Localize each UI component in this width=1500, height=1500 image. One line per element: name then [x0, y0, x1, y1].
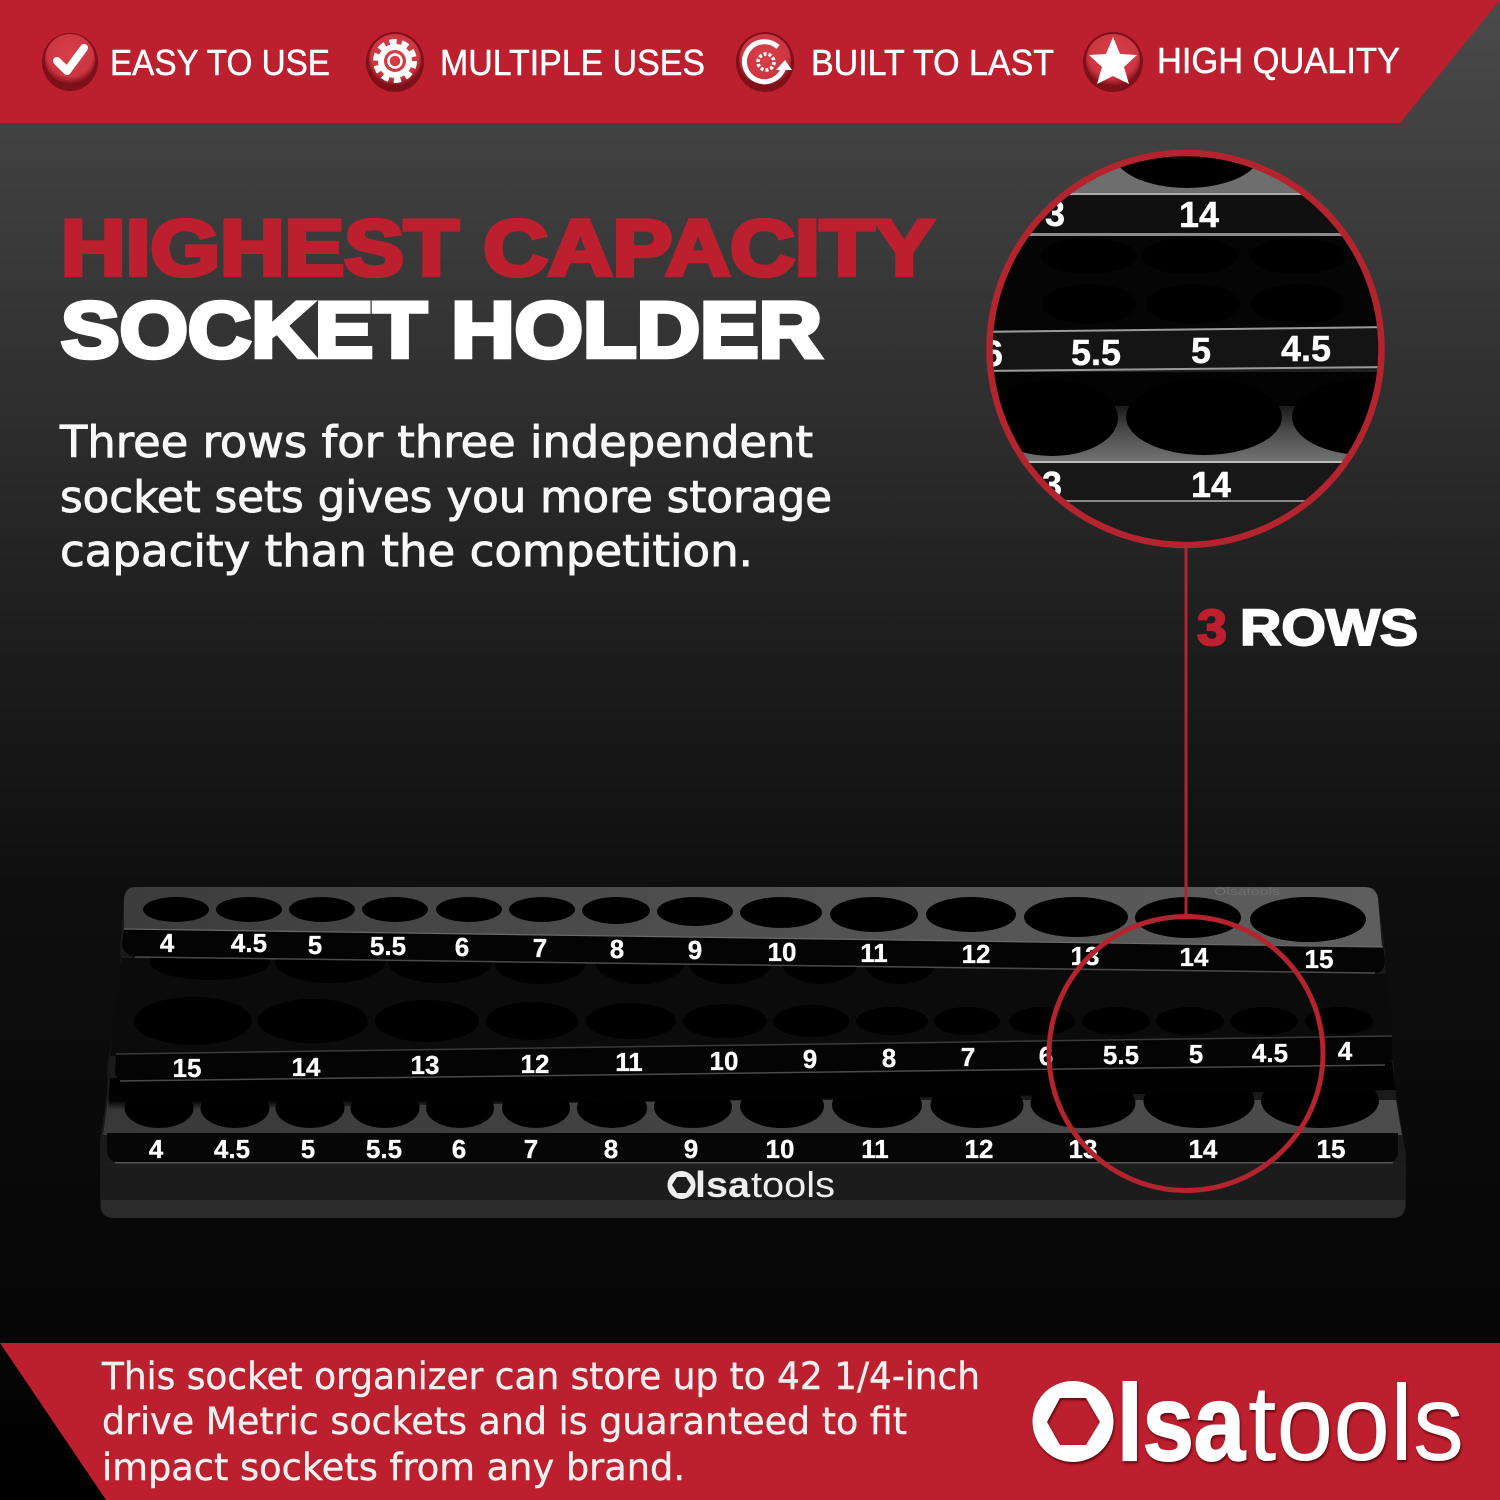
top row size labels: 10 [768, 937, 796, 967]
magnified size labels [983, 193, 1331, 505]
magnified top row [1030, 156, 1342, 236]
wall reflections [150, 940, 935, 984]
magnified size labels: 4.5 [1281, 328, 1331, 369]
bottom row size labels: 4.5 [214, 1134, 250, 1164]
bottom row size labels [149, 1134, 1345, 1164]
top red banner [0, 0, 1500, 123]
middle row size labels: 8 [882, 1043, 896, 1073]
banner description [101, 1355, 980, 1489]
bottom row size labels: 6 [452, 1134, 466, 1164]
heading: SOCKET HOLDER [61, 285, 822, 374]
intro paragraph: socket sets gives you more storage [60, 472, 832, 523]
magnified size labels: 5 [1191, 330, 1211, 371]
heading [61, 203, 934, 374]
magnified size labels: 6 [983, 333, 1003, 374]
middle row size labels: 12 [521, 1049, 549, 1079]
top row size labels: 12 [962, 939, 990, 969]
brand logo: tools [1248, 1362, 1464, 1483]
badge: multiple uses [366, 32, 705, 92]
middle row size labels: 15 [173, 1053, 201, 1083]
product: three-row socket tray [100, 886, 1406, 1218]
badge: high quality [1083, 32, 1400, 92]
bottom row size labels: 7 [524, 1134, 538, 1164]
bottom red banner [0, 1343, 1500, 1500]
top row size labels: 5.5 [370, 931, 406, 961]
middle row size labels: 5 [1189, 1039, 1203, 1069]
middle row size labels: 11 [615, 1047, 643, 1077]
callout: magnified view [986, 150, 1385, 548]
faint embossed logo on top plate: Olsatools [1214, 886, 1281, 898]
badge: high quality: HIGH QUALITY [1157, 40, 1400, 81]
middle row size labels: 10 [710, 1046, 738, 1076]
tray silhouette [100, 887, 1406, 1218]
top row size labels: 15 [1305, 944, 1333, 974]
middle tier wall and surface [110, 958, 1392, 1056]
icon: check mark [42, 33, 98, 91]
bottom row size labels: 5.5 [366, 1134, 402, 1164]
badge: easy to use [42, 33, 330, 91]
intro paragraph [59, 417, 832, 577]
badge: built to last [736, 32, 1054, 92]
brand logo [1033, 1362, 1464, 1483]
top row size labels: 9 [688, 935, 702, 965]
bottom row size labels: 9 [684, 1134, 698, 1164]
magnified bottom row [994, 372, 1377, 502]
top row size labels: 11 [860, 938, 888, 968]
magnified middle row [980, 236, 1390, 372]
heading: HIGHEST CAPACITY [61, 203, 934, 292]
middle row size labels: 13 [411, 1050, 439, 1080]
top row size labels: 5 [308, 930, 322, 960]
callout: ring around tray section [1049, 916, 1323, 1190]
callout label: 3 rows: 3 [1197, 599, 1227, 656]
badge: built to last: BUILT TO LAST [811, 42, 1054, 83]
top row size labels: 14 [1180, 942, 1209, 972]
top row size labels: 8 [610, 934, 624, 964]
bottom row size labels: 10 [766, 1134, 794, 1164]
brand logo: lsa [1117, 1362, 1246, 1483]
bottom row size labels: 14 [1189, 1134, 1218, 1164]
bottom tier top surface [103, 1100, 1402, 1135]
bottom row size labels: 11 [861, 1134, 889, 1164]
callout label: 3 rows: ROWS [1240, 599, 1418, 656]
middle tier label strip [115, 1036, 1393, 1081]
callout: connector line [1184, 546, 1188, 916]
bottom row size labels: 15 [1317, 1134, 1345, 1164]
bottom tier label strip [107, 1133, 1398, 1164]
magnified size labels: 14 [1179, 194, 1219, 235]
icon: star [1083, 32, 1143, 92]
magnified size labels: 14 [1191, 464, 1231, 505]
badge: easy to use: EASY TO USE [110, 42, 330, 83]
bottom row size labels: 4 [149, 1134, 164, 1164]
middle row size labels: 4 [1338, 1036, 1353, 1066]
middle row size labels: 4.5 [1252, 1038, 1288, 1068]
top row holes [143, 897, 1366, 942]
tray front logo: tools [751, 1164, 835, 1205]
bottom row holes [124, 1074, 1379, 1128]
shadow above the bottom row [108, 1062, 1396, 1110]
banner description: This socket organizer can store up to 42 1/4-inch [101, 1355, 980, 1398]
middle row size labels: 6 [1039, 1041, 1053, 1071]
middle row size labels: 7 [961, 1042, 975, 1072]
top row size labels [160, 928, 1333, 974]
magnified size labels: 3 [1045, 193, 1065, 234]
top tier label strip [122, 929, 1385, 973]
tray front logo [668, 1164, 835, 1205]
top row size labels: 6 [455, 932, 469, 962]
top row size labels: 4.5 [231, 928, 267, 958]
icon: gear [366, 32, 424, 92]
icon: gear with arrow [736, 32, 794, 92]
badge: multiple uses: MULTIPLE USES [440, 42, 705, 83]
banner description: drive Metric sockets and is guaranteed to fit [102, 1400, 907, 1443]
bottom row size labels: 12 [965, 1134, 993, 1164]
top row size labels: 13 [1071, 941, 1099, 971]
top plate [124, 887, 1382, 947]
top row size labels: 7 [533, 933, 547, 963]
tray front logo: lsa [695, 1164, 751, 1205]
banner description: impact sockets from any brand. [102, 1446, 685, 1489]
middle row size labels [173, 1036, 1353, 1083]
middle row size labels: 5.5 [1103, 1040, 1139, 1070]
middle row holes [134, 997, 1373, 1045]
bottom row size labels: 5 [301, 1134, 315, 1164]
bottom row size labels: 8 [604, 1134, 618, 1164]
magnified size labels: 3 [1042, 464, 1062, 505]
bottom tier front and base [101, 1162, 1405, 1218]
middle row size labels: 9 [803, 1044, 817, 1074]
intro paragraph: capacity than the competition. [60, 526, 753, 577]
intro paragraph: Three rows for three independent [59, 417, 813, 468]
magnified size labels: 5.5 [1071, 332, 1121, 373]
top row size labels: 4 [160, 928, 175, 958]
middle row size labels: 14 [292, 1052, 321, 1082]
bottom row size labels: 13 [1069, 1134, 1097, 1164]
